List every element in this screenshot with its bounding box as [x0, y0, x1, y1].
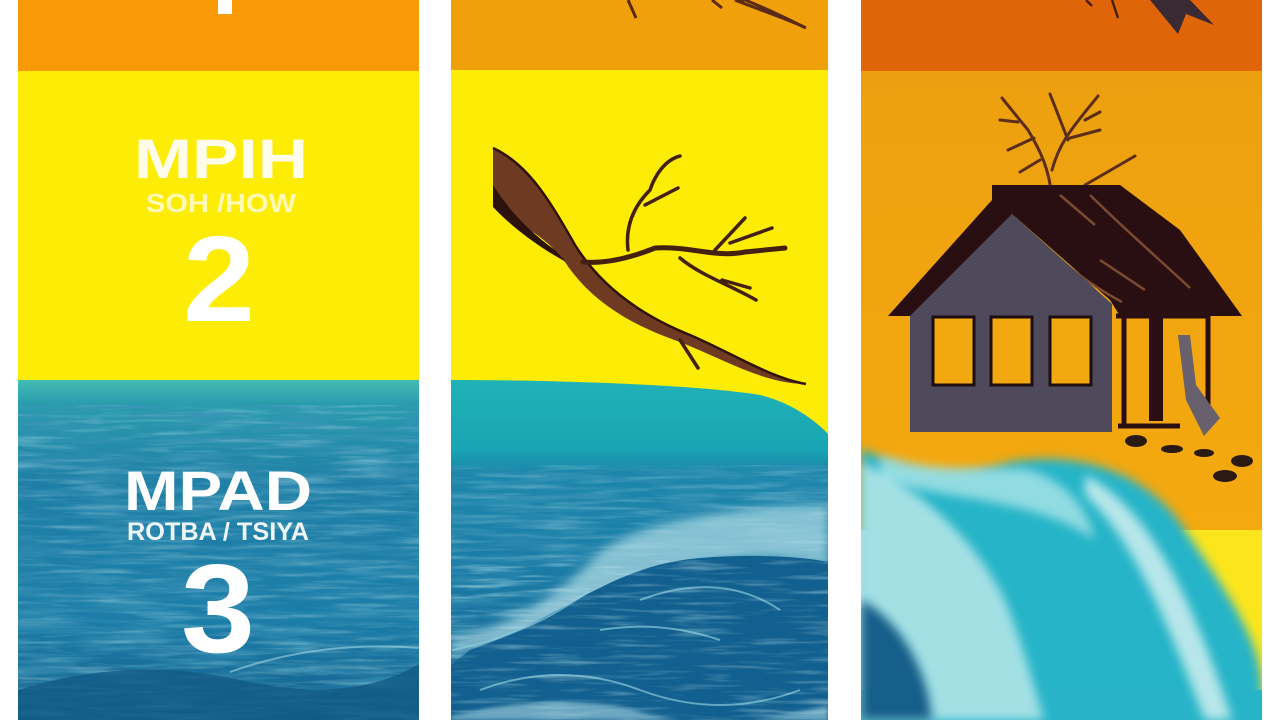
number 3: 3	[181, 538, 255, 679]
yellow band	[18, 71, 419, 381]
windows	[933, 317, 974, 385]
roof damage lines	[1030, 195, 1190, 302]
panel: right house and wave column	[861, 0, 1262, 720]
dark orange top band	[861, 0, 1262, 71]
cresting wave	[451, 505, 828, 720]
limb	[493, 148, 806, 384]
illustration: bare branch	[493, 148, 806, 384]
number 2: 2	[183, 211, 255, 347]
heading: MPIH: MPIH	[134, 127, 308, 190]
debris	[1125, 435, 1253, 482]
panel: middle branch and wave column	[451, 0, 828, 720]
number 1	[218, 0, 232, 14]
subheading: location: ROTBA / TSIYA	[127, 518, 309, 546]
broken post	[1178, 335, 1220, 436]
house body	[910, 214, 1112, 432]
amber band	[861, 71, 1262, 530]
heading: MPAD: MPAD	[124, 459, 312, 522]
yellow band	[451, 70, 828, 440]
twigs	[583, 156, 785, 368]
subheading: speed unit: SOH /HOW	[146, 188, 296, 218]
illustration: damaged house	[888, 94, 1253, 482]
bird or branch fragment at top	[1086, 0, 1214, 34]
orange top band	[18, 0, 419, 71]
ocean background	[18, 380, 419, 720]
orange top band	[451, 0, 828, 70]
branch fragment at top	[628, 0, 806, 28]
porch	[1116, 316, 1208, 426]
roof	[888, 185, 1242, 316]
panel: left category column	[18, 0, 419, 720]
giant wave	[861, 448, 1262, 720]
teal water surface	[451, 380, 828, 665]
bare tree	[998, 92, 1137, 185]
yellow corner	[1175, 530, 1262, 690]
